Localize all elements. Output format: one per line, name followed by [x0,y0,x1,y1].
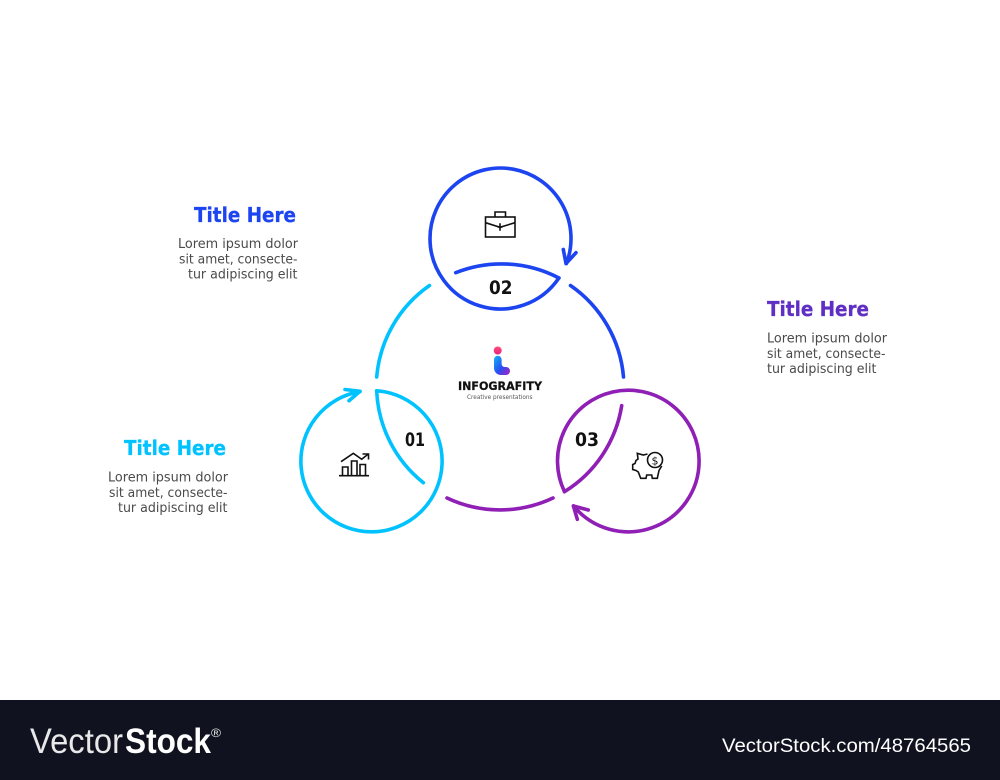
logo tagline: Creative presentations [467,395,532,401]
purple body: sit amet, consecte- [767,347,886,362]
purple arrowhead [573,506,588,519]
purple inner arc [564,406,622,492]
number 01: 01 [405,430,425,451]
text block: cyan [108,436,229,516]
cyan outer arc [377,286,430,377]
blue body: sit amet, consecte- [179,252,298,268]
blue body: tur adipiscing elit [188,268,298,282]
footer image id: VectorStock.com/48764565 [722,736,971,757]
step 02: blue circle with arrow [430,168,624,377]
blue inner arc [456,264,559,278]
footer logo: Stock [125,722,211,761]
cyan looping circle [301,391,442,532]
cyan body [108,470,229,516]
footer bar [0,700,1000,780]
text block: purple [767,297,888,377]
purple body: tur adipiscing elit [767,362,876,377]
cyan title: Title Here [124,436,226,460]
logo name: INFOGRAFITY [458,379,543,393]
footer logo: ® [211,726,221,740]
purple outer arc [447,498,553,510]
blue title: Title Here [194,203,296,227]
cyan arrowhead [345,390,360,401]
purple body: Lorem ipsum dolor [767,332,888,346]
blue body: Lorem ipsum dolor [178,237,299,252]
center logo [458,346,543,401]
text block: blue [178,203,299,282]
purple title: Title Here [767,297,869,321]
icon: bar chart with rising arrow [339,453,369,476]
number 02: 02 [489,278,512,299]
icon: briefcase [486,212,515,237]
blue arrowhead [563,250,576,264]
step 03: purple circle with arrow [447,390,699,532]
logo mark [494,346,510,375]
purple looping circle [557,390,699,532]
blue body [178,237,299,282]
icon: piggy bank with coin: $ [652,454,658,468]
blue outer arc [570,286,624,377]
number 03: 03 [575,430,599,451]
blue looping circle [430,168,571,309]
footer logo [30,722,221,761]
step 01: cyan circle with arrow [301,286,442,532]
footer logo: Vector [30,722,123,761]
cyan inner arc [377,391,423,483]
cyan body: Lorem ipsum dolor [108,470,229,486]
cyan body: tur adipiscing elit [118,501,228,516]
purple body [767,332,888,377]
cyan body: sit amet, consecte- [109,486,228,501]
icon: piggy bank with coin [633,452,662,478]
